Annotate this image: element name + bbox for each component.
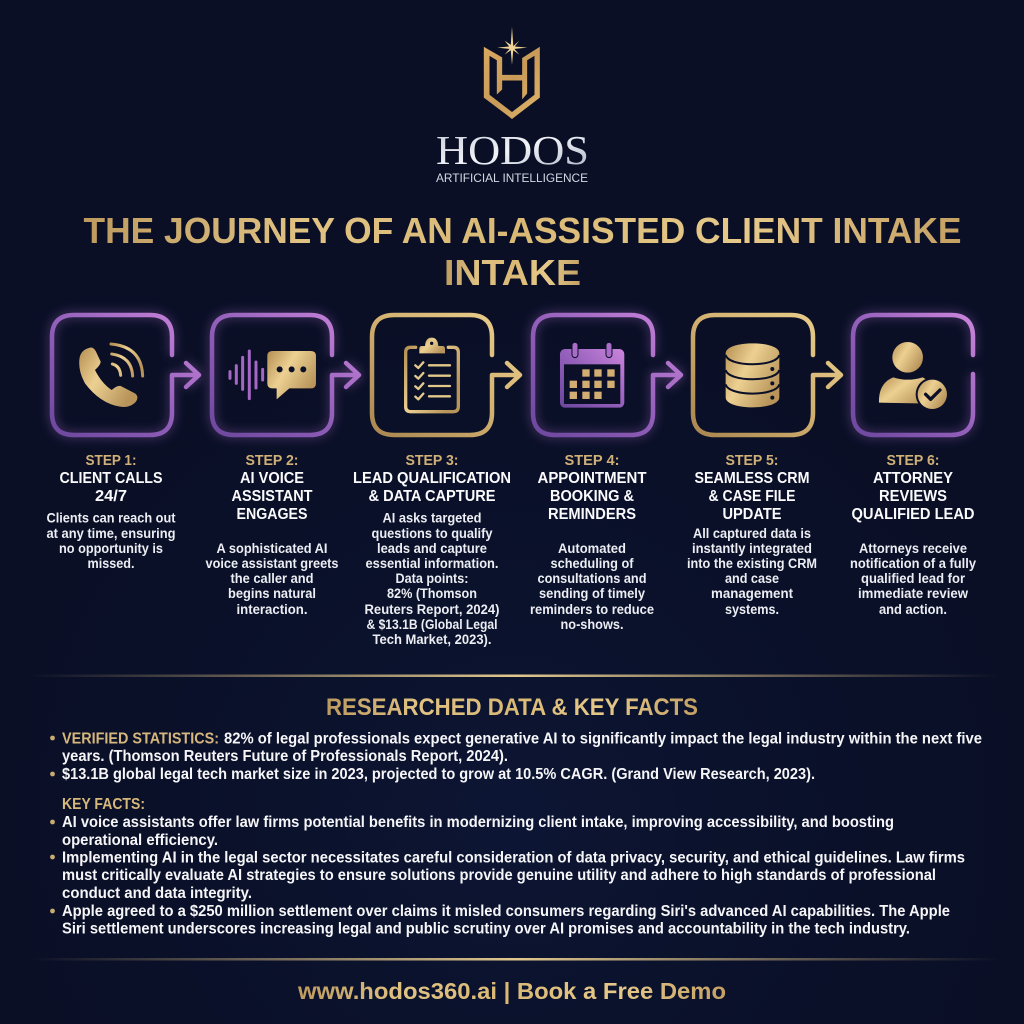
step 5 text: STEP 5: <box>726 452 778 469</box>
step 1 text: no opportunity is <box>59 541 163 556</box>
step 5 text: & CASE FILE <box>708 488 796 505</box>
step 6 text: Attorneys receive <box>859 541 967 556</box>
step 1 text: STEP 1: <box>86 452 136 469</box>
step 3 text: & DATA CAPTURE <box>368 488 496 505</box>
step 6 text: STEP 6: <box>886 452 940 469</box>
title <box>84 210 962 293</box>
step 3 text: Data points: <box>396 571 468 586</box>
panel: key facts: Siri settlement underscores increasing legal and public scrutiny over AI promises and accountability in the tech industry. <box>62 920 910 938</box>
step 4 text: consultations and <box>538 571 646 586</box>
step 1 text: CLIENT CALLS <box>60 470 163 487</box>
step 3 text: Tech Market, 2023). <box>372 632 492 647</box>
panel: verified statistics: years. (Thomson Reuters Future of Professionals Report, 2024). <box>62 748 508 765</box>
step 6 text: and action. <box>879 602 947 617</box>
step 3 text: questions to qualify <box>372 526 493 541</box>
panel: step 6 icon box <box>853 315 973 435</box>
step 5 text: systems. <box>725 602 779 617</box>
panel: key facts: Implementing AI in the legal sector necessitates careful consideration of data privacy, security, and ethical guidelines. Law firms <box>62 850 965 866</box>
step 1 text: missed. <box>88 556 134 571</box>
logo: Hodos <box>436 27 589 185</box>
step 4 text: APPOINTMENT <box>538 470 647 487</box>
icon: voice wave and chat bubble <box>230 351 316 399</box>
panel: key facts: KEY FACTS: <box>62 796 145 813</box>
panel: key facts: operational efficiency. <box>62 832 218 849</box>
title: THE JOURNEY OF AN AI-ASSISTED CLIENT INTAKE <box>84 210 962 251</box>
step 6 text: REVIEWS <box>879 488 947 505</box>
icon: calendar <box>560 342 624 408</box>
heading: researched data: RESEARCHED DATA & KEY FACTS <box>326 694 698 721</box>
panel: key facts: must critically evaluate AI strategies to ensure solutions provide genuine utility and adhere to high standards of professional <box>62 867 936 884</box>
step 2 text: AI VOICE <box>240 470 304 487</box>
step 1 text: 24/7 <box>95 488 127 505</box>
step 5 text: and case <box>725 571 779 586</box>
step 5 text: All captured data is <box>693 526 811 541</box>
panel: step 3 icon box with arrow <box>372 315 520 435</box>
step 6 text <box>850 452 976 617</box>
step 3 text: leads and capture <box>377 541 487 556</box>
step 1 text: Clients can reach out <box>46 510 176 526</box>
step 2 text: ASSISTANT <box>232 488 313 505</box>
icon: person with check badge <box>879 342 949 411</box>
icon: database <box>726 343 779 407</box>
footer call to action: www.hodos360.ai | Book a Free Demo <box>297 978 726 1004</box>
step 3 text: essential information. <box>366 556 498 571</box>
panel: key facts: conduct and data integrity. <box>62 885 252 902</box>
step 5 text <box>687 452 817 617</box>
step 2 text: the caller and <box>230 571 314 586</box>
step 3 text: Reuters Report, 2024) <box>364 602 500 617</box>
icon: clipboard checklist <box>406 338 458 412</box>
step 6 text: QUALIFIED LEAD <box>852 506 974 523</box>
step 5 text: management <box>711 586 793 601</box>
step 3 text: 82% (Thomson <box>387 586 477 601</box>
step 2 text: A sophisticated AI <box>216 541 328 556</box>
panel: key facts: AI voice assistants offer law firms potential benefits in modernizing client intake, improving accessibility, and boosting <box>62 814 894 831</box>
step 4 text: REMINDERS <box>548 506 636 523</box>
step 4 text: scheduling of <box>550 556 634 571</box>
step 6 text: notification of a fully <box>850 556 976 571</box>
panel: step 2 icon box with arrow <box>212 315 359 435</box>
step 3 text: LEAD QUALIFICATION <box>353 470 511 487</box>
step 4 text: sending of timely <box>539 586 645 601</box>
icon: shield monogram <box>484 27 539 118</box>
step 4 text: Automated <box>558 541 626 556</box>
brand name: HODOS <box>436 127 589 173</box>
step 4 text: BOOKING & <box>550 488 634 505</box>
step 3 text: AI asks targeted <box>382 510 482 526</box>
step 3 text <box>353 452 511 647</box>
step 5 text: instantly integrated <box>692 541 812 556</box>
step 5 text: into the existing CRM <box>687 556 817 571</box>
step 4 text: no-shows. <box>560 617 624 632</box>
step 6 text: ATTORNEY <box>873 470 953 487</box>
panel: key facts <box>50 796 965 938</box>
step 2 text: interaction. <box>236 602 308 617</box>
panel: verified statistics <box>50 730 982 783</box>
icon: phone <box>79 344 143 407</box>
title: INTAKE <box>444 252 581 293</box>
step 3 text: STEP 3: <box>406 452 458 469</box>
step 2 text: ENGAGES <box>236 506 308 523</box>
step 4 text: STEP 4: <box>564 452 620 469</box>
brand tagline: ARTIFICIAL INTELLIGENCE <box>436 173 588 185</box>
panel: step 4 icon box with arrow <box>533 315 681 435</box>
step 4 text: reminders to reduce <box>530 602 654 617</box>
panel: verified statistics: $13.1B global legal tech market size in 2023, projected to grow at 10.5% CAGR. (Grand View Research, 2023). <box>62 766 815 783</box>
step 4 text <box>530 452 654 632</box>
step 3 text: & $13.1B (Global Legal <box>366 617 498 632</box>
step 2 text: STEP 2: <box>246 452 298 469</box>
panel: step 5 icon box with arrow <box>693 315 841 435</box>
step 2 text: voice assistant greets <box>206 556 338 571</box>
panel: verified statistics: 82% of legal professionals expect generative AI to significantly impact the legal industry within the next five <box>224 730 982 748</box>
panel: verified statistics: VERIFIED STATISTICS: <box>62 730 219 748</box>
panel: key facts: Apple agreed to a $250 million settlement over claims it misled consumers regarding Siri's advanced AI capabilities. The Apple <box>62 903 950 920</box>
step 5 text: SEAMLESS CRM <box>694 470 810 487</box>
step 2 text: begins natural <box>228 586 316 601</box>
step 1 text <box>46 452 176 571</box>
step 6 text: immediate review <box>858 586 968 601</box>
step 2 text <box>206 452 338 617</box>
step 5 text: UPDATE <box>722 506 782 523</box>
panel: step 1 icon box with arrow <box>52 315 199 435</box>
step 1 text: at any time, ensuring <box>46 526 176 541</box>
step 6 text: qualified lead for <box>861 571 966 586</box>
